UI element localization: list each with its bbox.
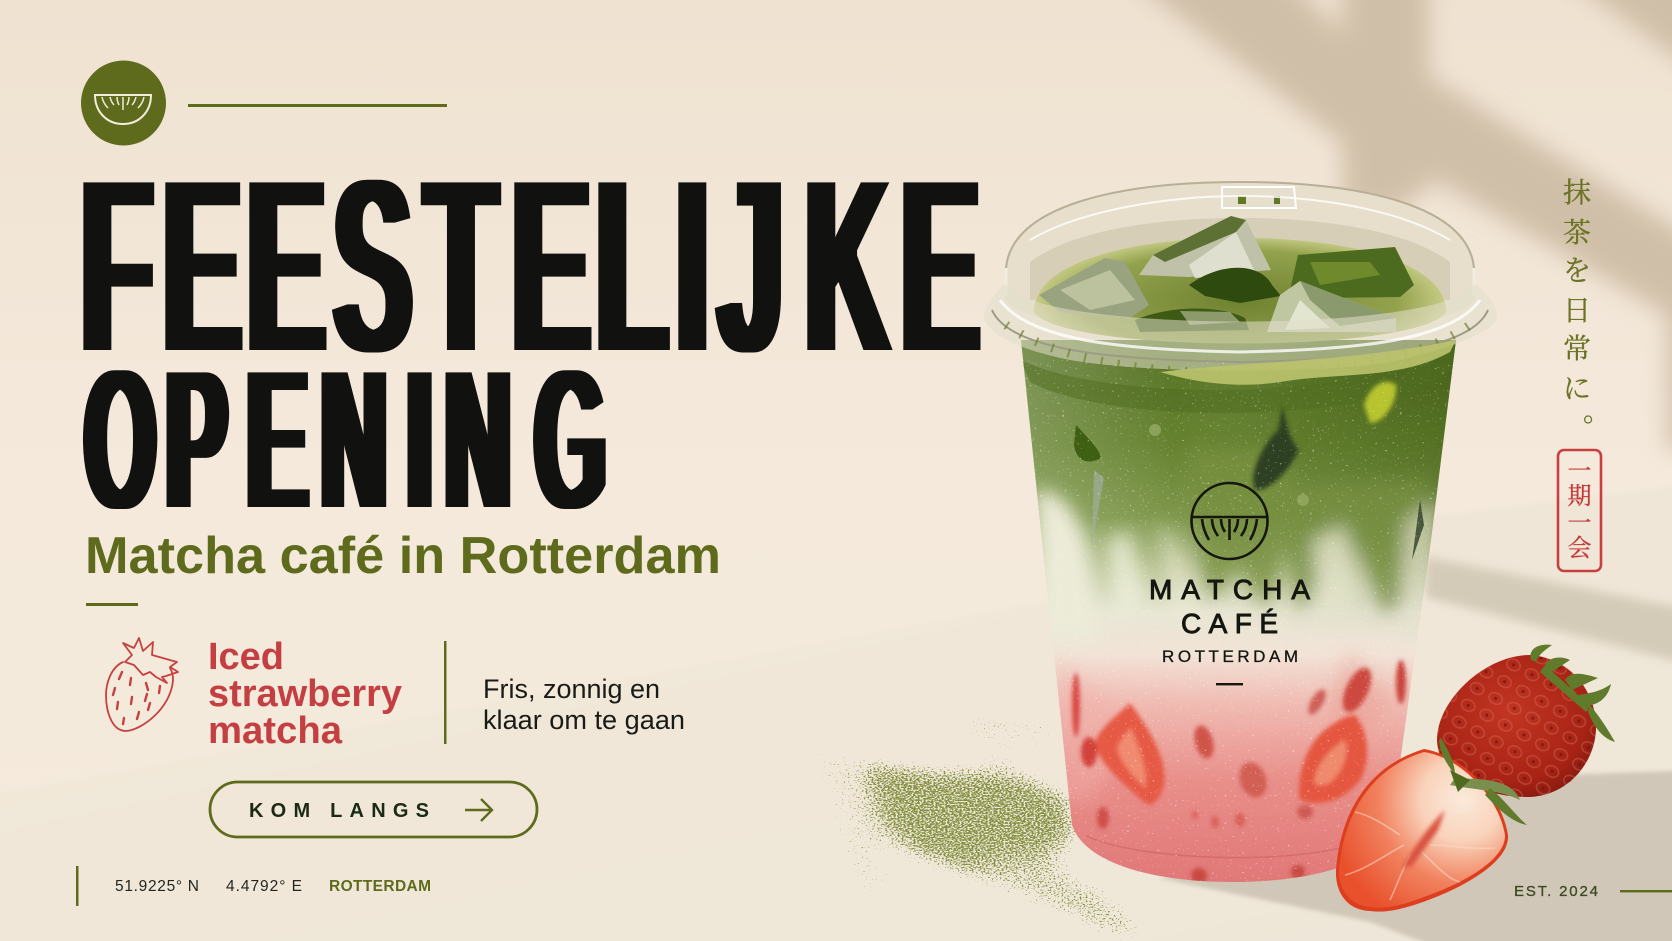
red stamp: 期 — [1568, 483, 1592, 510]
coordinates footer: 4.4792° E — [226, 878, 302, 895]
red stamp: 会 — [1568, 535, 1592, 562]
vertical divider — [444, 641, 446, 744]
icon: strawberry outline — [106, 638, 178, 731]
brand badge — [81, 60, 166, 146]
condensation droplets — [1010, 360, 1470, 890]
cup label text: ROTTERDAM — [1162, 647, 1298, 666]
tagline: klaar om te gaan — [483, 705, 685, 735]
vertical japanese tagline: 常 — [1563, 333, 1591, 365]
button: kom langs — [210, 782, 537, 837]
vertical japanese tagline: 日 — [1563, 296, 1591, 327]
icon: bowl and whisk — [95, 95, 151, 124]
title — [81, 125, 980, 553]
halved strawberry — [1336, 738, 1527, 912]
decorative rule beside the badge — [188, 104, 447, 107]
red stamp: 一 — [1568, 511, 1592, 537]
cup body — [1021, 340, 1456, 882]
table surface — [0, 602, 1672, 941]
cream and matcha swirls — [1035, 450, 1440, 800]
froth line under the lid — [1160, 340, 1456, 385]
matcha powder scatter — [790, 690, 1180, 941]
arrow — [465, 799, 492, 821]
product name — [208, 636, 402, 752]
red stamp — [1558, 450, 1601, 571]
coordinates footer — [76, 866, 431, 906]
ice cubes — [1139, 216, 1271, 277]
iced strawberry matcha cup — [984, 182, 1497, 900]
coordinates footer: ROTTERDAM — [329, 878, 431, 895]
clear lid — [984, 182, 1497, 385]
product name: Iced — [208, 636, 284, 678]
leaf sprig — [1439, 738, 1527, 825]
vertical japanese tagline: 抹 — [1563, 177, 1591, 209]
coordinates footer: 51.9225° N — [115, 878, 199, 895]
vertical japanese tagline: 。 — [1583, 397, 1611, 428]
product name: matcha — [208, 710, 343, 752]
red stamp: 一 — [1568, 459, 1592, 485]
lid straw slot — [1222, 187, 1296, 208]
tagline — [483, 674, 685, 735]
cup logo: bowl and whisk mark — [1191, 483, 1268, 559]
cup label text: MATCHA — [1149, 574, 1310, 605]
short subtitle rule — [86, 603, 138, 606]
light shadow on the wall, top right — [1107, 0, 1672, 450]
cup label text — [1149, 574, 1310, 685]
lid dome lines — [1006, 182, 1474, 268]
button: kom langs: KOM LANGS — [249, 800, 429, 822]
vertical japanese tagline: を — [1563, 256, 1591, 287]
established label: EST. 2024 — [1514, 883, 1598, 900]
tagline: Fris, zonnig en — [483, 674, 660, 704]
cup label text: CAFÉ — [1181, 608, 1278, 639]
lid interior — [1006, 182, 1474, 338]
title: FEESTELIJKE — [81, 125, 980, 406]
vertical japanese tagline — [1563, 177, 1611, 428]
title: OPENING — [85, 328, 606, 553]
cup and strawberry cast shadow — [1158, 770, 1672, 941]
subtitle: Matcha café in Rotterdam — [85, 527, 721, 585]
dark matcha pockets and ring — [1021, 345, 1456, 560]
strawberry leaves — [1530, 645, 1615, 742]
berry pieces in the drink — [1072, 660, 1406, 884]
vertical japanese tagline: に — [1563, 374, 1591, 405]
whole strawberry — [1437, 645, 1615, 797]
vertical japanese tagline: 茶 — [1563, 217, 1591, 249]
product name: strawberry — [208, 673, 402, 715]
lid outer rim — [984, 284, 1497, 371]
window shadow on the table — [1425, 557, 1672, 672]
